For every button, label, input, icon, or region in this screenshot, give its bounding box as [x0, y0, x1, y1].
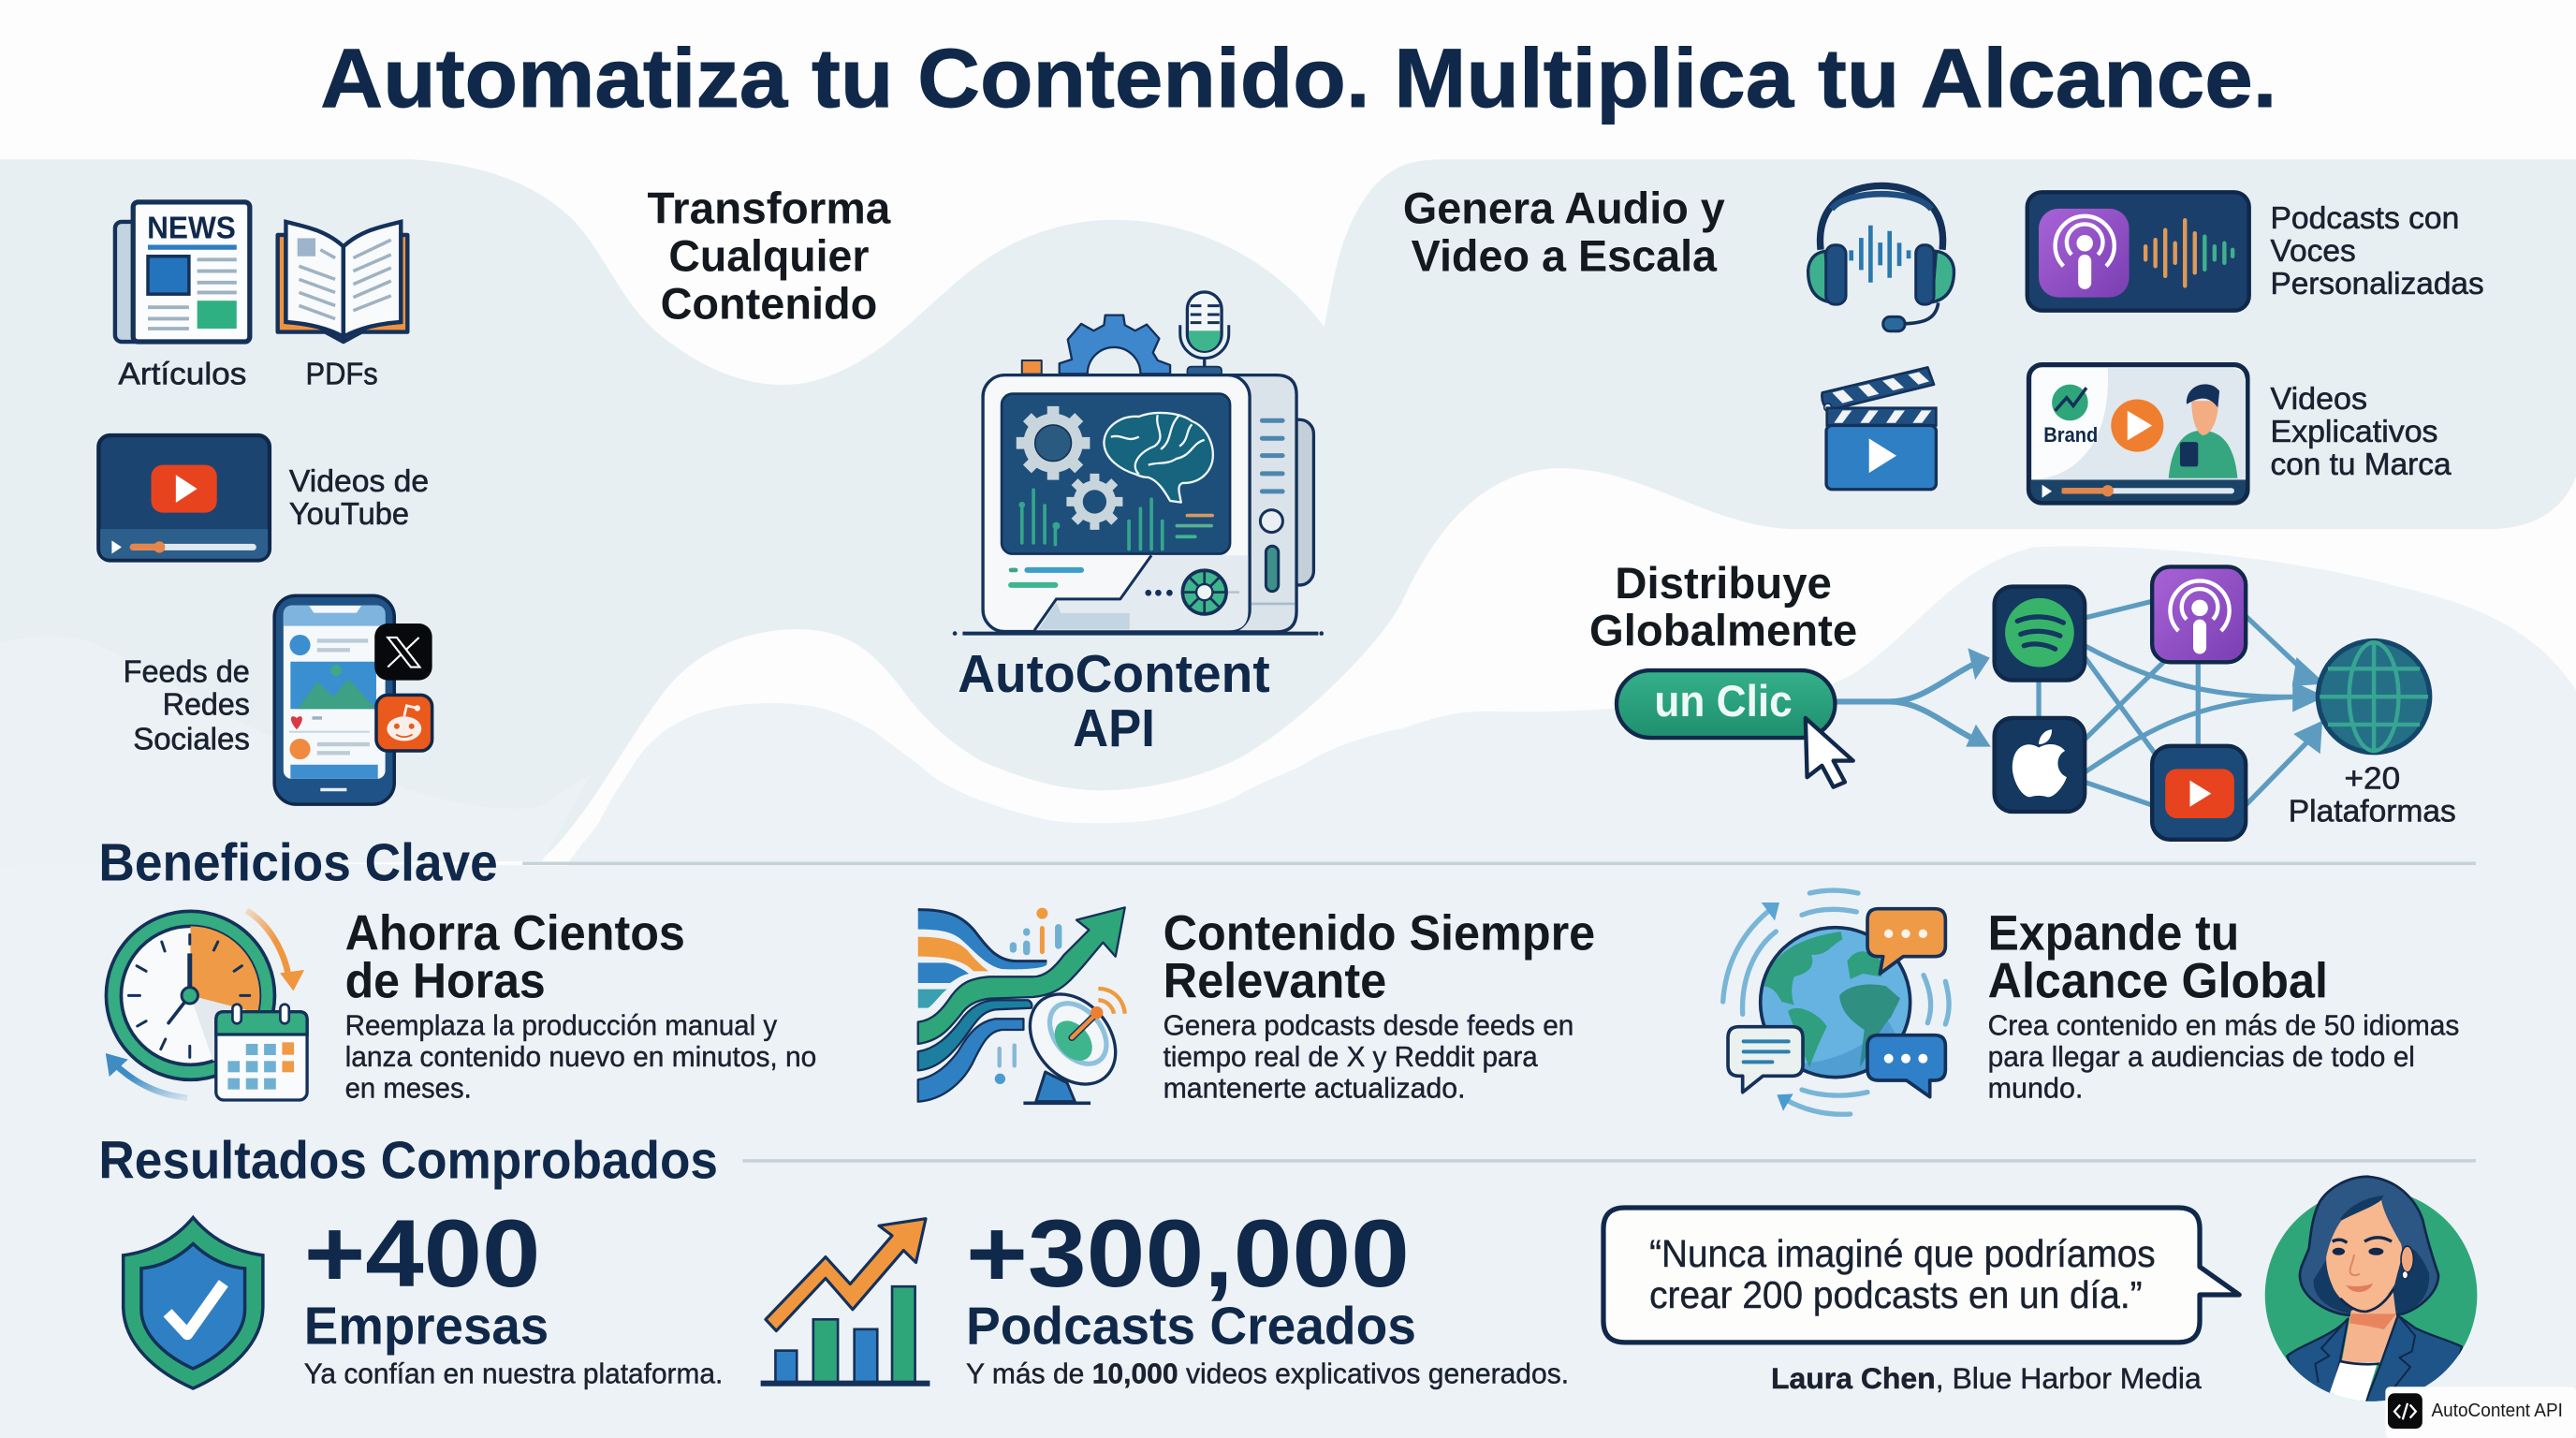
text: Contenido Siempre Relevante — [1164, 905, 1595, 1104]
icon: clapperboard — [1822, 367, 1936, 490]
label: Videos Explicativos con tu Marca: Explicativos — [2271, 415, 2438, 449]
heading: Beneficios Clave: Beneficios Clave — [98, 833, 498, 892]
label: AutoContent API: API — [1073, 698, 1155, 757]
stat: +400 Empresas — [304, 1200, 723, 1390]
icon: globe with chat bubbles — [1723, 890, 1949, 1114]
text: Ahorra Cientos de Horas: de Horas — [345, 953, 546, 1008]
text: Contenido Siempre Relevante: mantenerte actualizado. — [1164, 1071, 1466, 1104]
label: Videos Explicativos con tu Marca — [2271, 382, 2452, 482]
label: Feeds de Redes Sociales — [124, 654, 250, 756]
label: Artículos: Artículos — [118, 358, 246, 392]
text: Ahorra Cientos de Horas: Reemplaza la producción manual y — [345, 1009, 778, 1042]
icon: shield with check — [124, 1217, 263, 1388]
portrait: Laura Chen — [2265, 1177, 2477, 1407]
heading: Genera Audio y Video a Escala: Genera Audio y — [1403, 184, 1725, 234]
text: Expande tu Alcance Global: mundo. — [1988, 1071, 2083, 1104]
heading: Genera Audio y Video a Escala: Video a Escala — [1412, 232, 1718, 282]
label: Feeds de Redes Sociales: Redes — [163, 687, 250, 722]
heading: Distribuye Globalmente: Globalmente — [1589, 607, 1857, 656]
label: Feeds de Redes Sociales: Sociales — [133, 722, 250, 756]
label: Videos Explicativos con tu Marca: con tu Marca — [2271, 448, 2452, 482]
heading: Transforma Cualquier Contenido — [648, 184, 891, 329]
heading: Transforma Cualquier Contenido: Cualquier — [668, 232, 869, 282]
stat: +400 Empresas: Empresas — [304, 1297, 549, 1356]
text: Expande tu Alcance Global: Expande tu — [1988, 905, 2239, 961]
stat: +300,000 Podcasts Creados — [966, 1200, 1569, 1390]
icon: YouTube tile — [2152, 746, 2246, 840]
label: Podcasts con Voces Personalizadas — [2271, 201, 2484, 301]
stat: +400 Empresas: +400 — [304, 1200, 540, 1307]
text: Contenido Siempre Relevante: tiempo real de X y Reddit para — [1164, 1040, 1539, 1073]
label: Videos de YouTube — [289, 464, 429, 532]
label: Podcasts con Voces Personalizadas: Podcasts con — [2271, 201, 2459, 236]
text: Contenido Siempre Relevante: Relevante — [1164, 953, 1386, 1008]
panel: branded explainer video — [2029, 365, 2247, 503]
label: Podcasts con Voces Personalizadas: Voces — [2271, 234, 2356, 269]
title: Automatiza tu Contenido. Multiplica tu Alcance. — [320, 31, 2277, 125]
icon: Spotify tile — [1995, 587, 2085, 681]
icon: data streams, growth arrow and satellite dish — [918, 907, 1133, 1103]
icon: Apple tile — [1995, 718, 2085, 812]
panel: podcast voices — [2027, 192, 2249, 311]
callout: testimonial quote — [1603, 1208, 2239, 1343]
label: AutoContent API — [958, 644, 1270, 757]
callout: testimonial quote: crear 200 podcasts en un día.” — [1649, 1273, 2143, 1316]
label: Videos Explicativos con tu Marca: Videos — [2271, 382, 2367, 417]
icon: X badge — [374, 624, 432, 681]
stat: +400 Empresas: Ya confían en nuestra plataforma. — [304, 1357, 723, 1390]
label: Feeds de Redes Sociales: Feeds de — [124, 654, 250, 689]
icon: newspaper: NEWS — [147, 211, 236, 245]
heading: Distribuye Globalmente — [1589, 559, 1857, 656]
background: lower wave panel — [0, 546, 2576, 1438]
icon: headphones — [1808, 185, 1954, 331]
label: +20 Plataformas — [2289, 761, 2456, 829]
text: Expande tu Alcance Global: Alcance Global — [1988, 953, 2328, 1008]
icon: clock and calendar — [106, 911, 307, 1100]
icon: open book — [278, 222, 407, 342]
stat: +300,000 Podcasts Creados: Y más de 10,000 videos explicativos generados. — [966, 1357, 1569, 1390]
distribution network arrows — [1835, 601, 2320, 805]
panel: branded explainer video: Brand — [2043, 423, 2098, 447]
text: Contenido Siempre Relevante: Contenido Siempre — [1164, 905, 1595, 961]
icon: Reddit badge — [376, 695, 432, 751]
callout: testimonial quote: “Nunca imaginé que podríamos — [1649, 1232, 2156, 1275]
text: Ahorra Cientos de Horas: Ahorra Cientos — [345, 905, 685, 961]
text: Expande tu Alcance Global: para llegar a audiencias de todo el — [1988, 1040, 2415, 1073]
status wheel — [1182, 570, 1239, 614]
button: un Clic: un Clic — [1654, 677, 1793, 726]
label: AutoContent API: AutoContent — [958, 644, 1270, 703]
text: Contenido Siempre Relevante: Genera podcasts desde feeds en — [1164, 1009, 1573, 1042]
text: Expande tu Alcance Global: Crea contenido en más de 50 idiomas — [1988, 1009, 2459, 1042]
gear on top — [1060, 315, 1170, 374]
icon: YouTube video player — [98, 435, 270, 560]
label: Podcasts con Voces Personalizadas: Personalizadas — [2271, 267, 2484, 301]
screen gears — [1017, 406, 1122, 530]
icon: cursor — [1806, 718, 1853, 787]
heading: Distribuye Globalmente: Distribuye — [1615, 559, 1832, 609]
icon: AutoContent machine — [953, 292, 1324, 636]
watermark: AutoContent API — [2385, 1387, 2576, 1438]
screen bars — [1018, 490, 1212, 550]
label: PDFs: PDFs — [305, 358, 378, 392]
text: Ahorra Cientos de Horas — [345, 905, 816, 1104]
icon: growth chart — [761, 1219, 929, 1384]
icon: phone with social feed — [274, 595, 394, 804]
text: Ahorra Cientos de Horas: en meses. — [345, 1071, 472, 1104]
heading: Transforma Cualquier Contenido: Transforma — [648, 184, 891, 234]
heading: Resultados Comprobados: Resultados Comprobados — [98, 1130, 718, 1189]
heading: Transforma Cualquier Contenido: Contenido — [661, 279, 877, 329]
text: Expande tu Alcance Global — [1988, 905, 2459, 1104]
background: upper wave panel — [0, 159, 2576, 861]
button: un Clic — [1617, 670, 1835, 738]
stat: +300,000 Podcasts Creados: Podcasts Creados — [966, 1297, 1416, 1356]
icon: globe — [2318, 640, 2430, 753]
microphone — [1180, 292, 1229, 374]
label: +20 Plataformas: +20 — [2344, 761, 2400, 796]
label: Laura Chen, Blue Harbor Media: Laura Chen, Blue Harbor Media — [1771, 1361, 2202, 1395]
label: +20 Plataformas: Plataformas — [2289, 795, 2456, 829]
icon: newspaper — [115, 202, 250, 342]
text: Ahorra Cientos de Horas: lanza contenido nuevo en minutos, no — [345, 1040, 816, 1073]
label: Videos de YouTube: YouTube — [289, 497, 409, 532]
stat: +300,000 Podcasts Creados: +300,000 — [966, 1200, 1410, 1307]
heading: Genera Audio y Video a Escala — [1403, 184, 1725, 282]
label: Videos de YouTube: Videos de — [289, 464, 429, 499]
icon: Podcasts tile — [2152, 566, 2246, 662]
screen brain — [1104, 413, 1213, 503]
watermark: AutoContent API: AutoContent API — [2431, 1401, 2563, 1421]
